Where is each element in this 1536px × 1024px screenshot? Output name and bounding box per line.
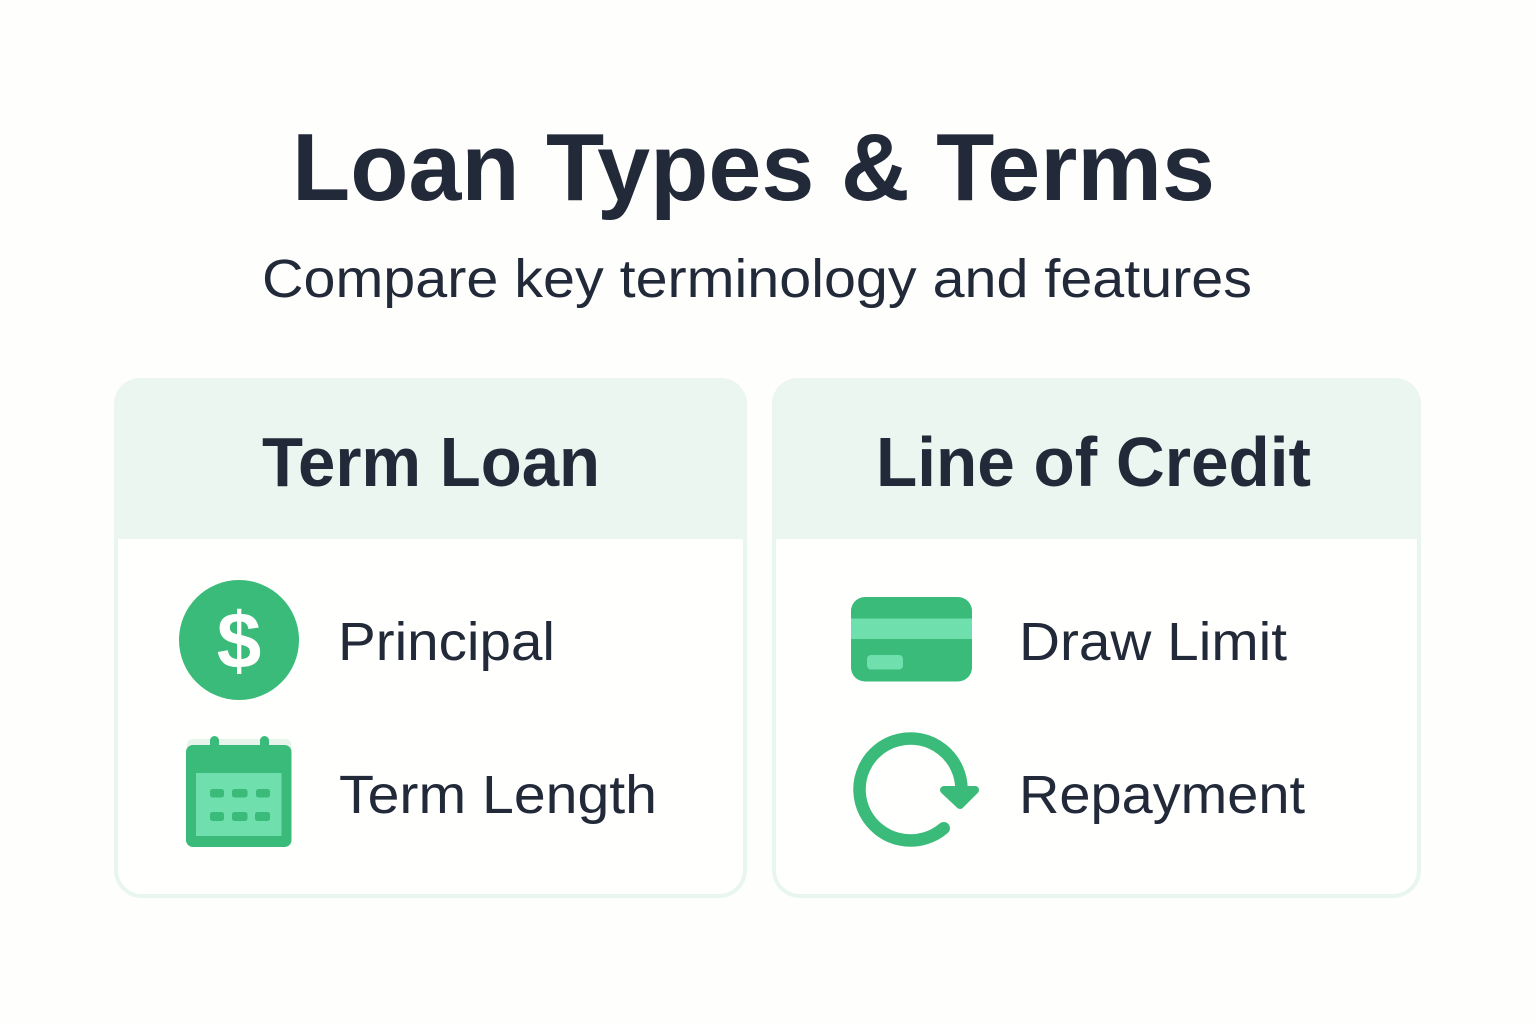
heading: line of credit: Line of Credit	[876, 423, 1311, 501]
label: term length: Term Length	[339, 765, 657, 825]
panel: term loan	[114, 378, 747, 896]
label: draw limit: Draw Limit	[1019, 612, 1287, 672]
card body	[774, 380, 1419, 896]
title: Loan Types & Terms	[292, 114, 1215, 221]
heading: term loan: Term Loan	[262, 423, 600, 501]
icon: calendar	[186, 736, 292, 847]
subtitle: Compare key terminology and features	[262, 249, 1252, 309]
card body	[116, 380, 745, 896]
icon: dollar coin: $	[217, 596, 261, 685]
panel: line of credit	[772, 378, 1421, 896]
icon: credit card	[851, 597, 972, 682]
label: principal: Principal	[338, 612, 555, 672]
card header	[114, 378, 747, 539]
icon: repayment arrow	[860, 738, 975, 840]
icon: dollar coin	[179, 580, 299, 700]
card header	[772, 378, 1421, 539]
label: repayment: Repayment	[1019, 765, 1305, 825]
